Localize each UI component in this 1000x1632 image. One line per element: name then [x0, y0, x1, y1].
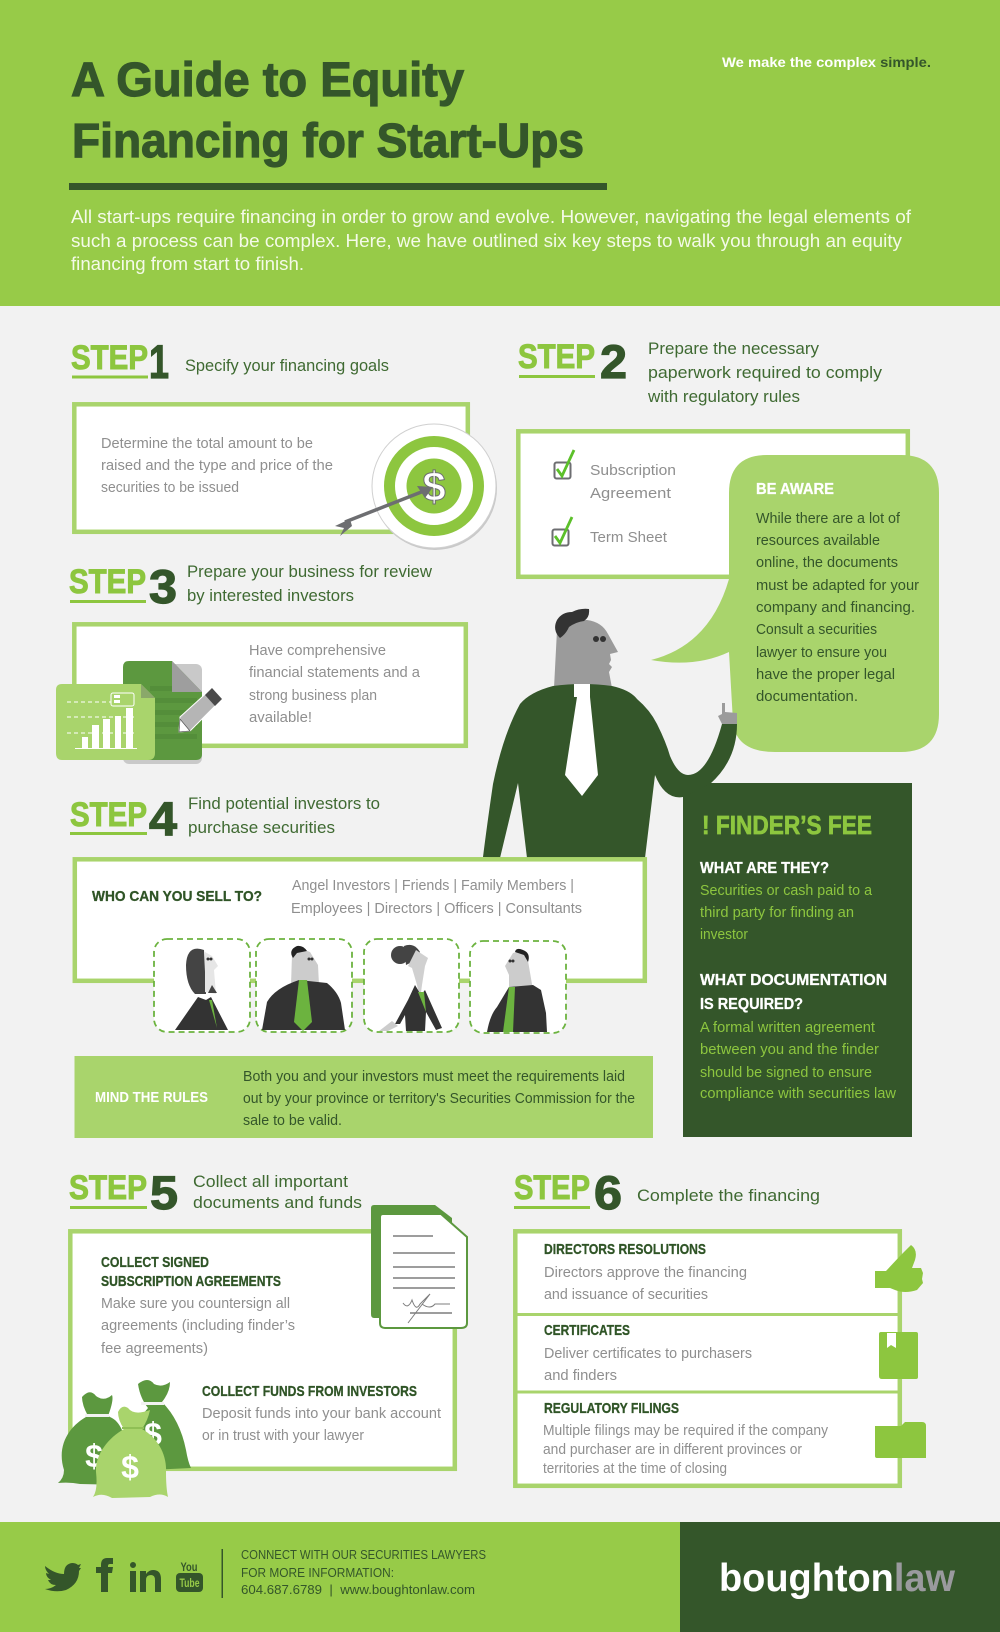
- illustration: businessman: [483, 609, 737, 858]
- step 2 heading: Prepare the necessary: [648, 339, 819, 358]
- icon: youtube: [176, 1560, 203, 1592]
- finder's fee panel: WHAT DOCUMENTATION: [700, 972, 887, 989]
- back-right bag: [130, 1380, 191, 1470]
- panel: step 6: [515, 1231, 900, 1486]
- step 1 heading: Specify your financing goals: [185, 356, 389, 375]
- intro text: such a process can be complex. Here, we have outlined six key steps to walk you through an equity: [71, 230, 903, 251]
- panel: step 2 checklist: Subscription: [590, 463, 676, 479]
- step 6 heading: [514, 1166, 820, 1219]
- panel: step 2 checklist: [518, 431, 908, 577]
- panel: step 4: WHO CAN YOU SELL TO?: [92, 889, 262, 905]
- tie: [565, 684, 598, 796]
- icon: target with arrow: [335, 424, 497, 550]
- icon: money bags: $: [85, 1438, 103, 1474]
- panel: step 6: and finders: [544, 1368, 617, 1384]
- icon: folder: [875, 1422, 926, 1458]
- step 6 heading: Complete the financing: [637, 1186, 820, 1205]
- finder's fee panel: should be signed to ensure: [700, 1065, 872, 1081]
- callout: be aware speech bubble: have the proper legal: [756, 667, 895, 683]
- finder's fee panel: ! FINDER’S FEE: [702, 810, 872, 840]
- icon: money bags: $: [144, 1416, 162, 1452]
- panel: mind the rules: sale to be valid.: [243, 1113, 342, 1129]
- icon: signed document: [371, 1205, 467, 1328]
- tagline: We make the complex simple.: [722, 55, 931, 70]
- panel: mind the rules: out by your province or territory's Securities Commission for the: [243, 1091, 635, 1107]
- panel: step 6: Directors approve the financing: [544, 1265, 747, 1281]
- step 5 heading: Collect all important: [193, 1172, 348, 1191]
- finder's fee panel: compliance with securities law: [700, 1086, 897, 1102]
- step 2 heading: 2: [600, 335, 627, 388]
- panel: step 5: COLLECT FUNDS FROM INVESTORS: [202, 1384, 417, 1400]
- panel: mind the rules: Both you and your investors must meet the requirements laid: [243, 1069, 625, 1085]
- step 3 heading: 3: [149, 560, 177, 613]
- callout: be aware speech bubble: must be adapted for your: [756, 578, 919, 594]
- panel: step 5: [70, 1231, 455, 1469]
- step 1 heading: [71, 335, 389, 388]
- panel: step 1: securities to be issued: [101, 480, 239, 496]
- step 4 heading: purchase securities: [188, 818, 335, 837]
- callout: be aware speech bubble: lawyer to ensure you: [756, 645, 887, 661]
- icon: money bags: [58, 1380, 191, 1498]
- panel: step 3: financial statements and a: [249, 665, 421, 681]
- panel: step 6: Multiple filings may be required if the company: [543, 1423, 829, 1439]
- finder's fee panel: between you and the finder: [700, 1042, 879, 1058]
- suit: [483, 684, 737, 858]
- finder's fee panel: [683, 783, 912, 1137]
- finder's fee panel: investor: [700, 927, 748, 943]
- panel: step 4: Angel Investors | Friends | Family Members |: [292, 878, 574, 894]
- investor: woman 3: [364, 939, 459, 1032]
- panel: step 5: or in trust with your lawyer: [202, 1428, 364, 1444]
- step 6 heading: STEP: [514, 1169, 590, 1207]
- step 4 heading: Find potential investors to: [188, 794, 380, 813]
- panel: step 5: COLLECT SIGNED: [101, 1255, 209, 1271]
- step 5 heading: STEP: [69, 1169, 147, 1207]
- panel: step 1: raised and the type and price of the: [101, 458, 333, 474]
- investor: woman 1: [154, 939, 250, 1032]
- step 5 heading: [69, 1166, 362, 1219]
- callout: be aware speech bubble: documentation.: [756, 689, 858, 705]
- step 1 heading: 1: [149, 335, 169, 388]
- icon: linkedin: [130, 1562, 161, 1592]
- step 3 heading: [69, 560, 433, 613]
- icon: checkbox 2: [552, 517, 572, 546]
- panel: step 5: Make sure you countersign all: [101, 1296, 290, 1312]
- step 1 heading: STEP: [71, 339, 148, 377]
- panel: mind the rules: [74, 1056, 653, 1138]
- investor: man 2: [256, 939, 352, 1032]
- panel: step 6: and issuance of securities: [544, 1287, 708, 1303]
- finder's fee panel: Securities or cash paid to a: [700, 883, 873, 899]
- panel: step 3: strong business plan: [249, 688, 377, 704]
- contact text: FOR MORE INFORMATION:: [241, 1566, 394, 1580]
- icon: documents and pencil: [56, 661, 222, 764]
- panel: step 2 checklist: Agreement: [590, 486, 671, 502]
- panel: step 6: Deliver certificates to purchasers: [544, 1346, 752, 1362]
- step 6 heading: 6: [594, 1166, 622, 1219]
- title: Financing for Start-Ups: [72, 115, 584, 168]
- step 2 heading: STEP: [518, 338, 595, 376]
- intro text: financing from start to finish.: [71, 253, 304, 274]
- eyes: [593, 636, 606, 642]
- callout: be aware speech bubble: resources available: [756, 533, 880, 549]
- panel: step 6: DIRECTORS RESOLUTIONS: [544, 1242, 706, 1258]
- panel: step 5: agreements (including finder’s: [101, 1318, 295, 1334]
- step 3 heading: Prepare your business for review: [187, 562, 433, 581]
- step 4 heading: 4: [149, 792, 177, 845]
- contact text: 604.687.6789 | www.boughtonlaw.com: [241, 1583, 475, 1597]
- investor cards: [154, 939, 566, 1033]
- step 2 heading: [518, 335, 883, 406]
- panel: step 3: Have comprehensive: [249, 643, 386, 659]
- title: A Guide to Equity: [71, 54, 464, 107]
- panel: step 1: [74, 404, 468, 532]
- callout: be aware speech bubble: company and financing.: [756, 600, 915, 616]
- callout: be aware speech bubble: [651, 455, 939, 752]
- hand: [718, 703, 737, 724]
- callout: be aware speech bubble: online, the documents: [756, 555, 898, 571]
- header banner: [0, 0, 1000, 306]
- step 2 heading: paperwork required to comply: [648, 363, 883, 382]
- finder's fee panel: WHAT ARE THEY?: [700, 860, 829, 877]
- panel: step 6: and purchaser are in different provinces or: [543, 1442, 802, 1458]
- intro text: [71, 206, 912, 274]
- hair: [555, 609, 589, 638]
- step 4 heading: STEP: [70, 796, 147, 834]
- icon: youtube: Tube: [180, 1576, 200, 1590]
- step 3 heading: STEP: [69, 563, 146, 601]
- finder's fee panel: IS REQUIRED?: [700, 996, 803, 1013]
- step 3 heading: by interested investors: [187, 586, 354, 605]
- back-left bag: [58, 1392, 127, 1485]
- icon: youtube: You: [180, 1560, 198, 1574]
- step 5 heading: 5: [150, 1166, 178, 1219]
- panel: step 5: Deposit funds into your bank account: [202, 1406, 441, 1422]
- panel: step 2 checklist: Term Sheet: [590, 530, 667, 546]
- icon: twitter: [45, 1563, 81, 1591]
- investor: man 4: [470, 941, 566, 1033]
- step 4 heading: [70, 792, 380, 845]
- callout: be aware speech bubble: BE AWARE: [756, 481, 834, 498]
- step 2 heading: with regulatory rules: [647, 387, 800, 406]
- icon: facebook: [96, 1558, 113, 1592]
- callout: be aware speech bubble: While there are a lot of: [756, 511, 901, 527]
- callout: be aware speech bubble: Consult a securities: [756, 622, 877, 638]
- intro text: All start-ups require financing in order to grow and evolve. However, navigating the legal elements of: [71, 206, 912, 227]
- logo: boughtonlaw: [719, 1557, 956, 1600]
- icon: thumbs up: [875, 1245, 923, 1292]
- panel: step 4: Employees | Directors | Officers | Consultants: [291, 901, 582, 917]
- panel: step 6: REGULATORY FILINGS: [544, 1401, 679, 1417]
- title: [71, 54, 584, 168]
- footer: [0, 1522, 1000, 1632]
- panel: mind the rules: MIND THE RULES: [95, 1090, 208, 1106]
- panel: step 1: Determine the total amount to be: [101, 436, 313, 452]
- panel: step 6: CERTIFICATES: [544, 1323, 630, 1339]
- step 5 heading: documents and funds: [193, 1193, 362, 1212]
- panel: step 5: fee agreements): [101, 1341, 208, 1357]
- finder's fee panel: third party for finding an: [700, 905, 854, 921]
- icon: target with arrow: $: [422, 463, 446, 510]
- icon: money bags: $: [121, 1449, 139, 1485]
- icon: checkbox 1: [554, 450, 574, 478]
- head: [554, 620, 618, 688]
- panel: step 5: SUBSCRIPTION AGREEMENTS: [101, 1274, 281, 1290]
- finder's fee panel: A formal written agreement: [700, 1020, 875, 1036]
- panel: step 4: [75, 859, 645, 981]
- panel: step 6: territories at the time of closing: [543, 1461, 727, 1477]
- panel: step 3: available!: [249, 710, 312, 726]
- front bag: [93, 1407, 168, 1498]
- contact text: CONNECT WITH OUR SECURITIES LAWYERS: [241, 1548, 486, 1562]
- icon: certificate book: [879, 1332, 918, 1379]
- title rule: [69, 183, 607, 190]
- contact text: [241, 1548, 486, 1597]
- panel: step 3: [74, 624, 466, 746]
